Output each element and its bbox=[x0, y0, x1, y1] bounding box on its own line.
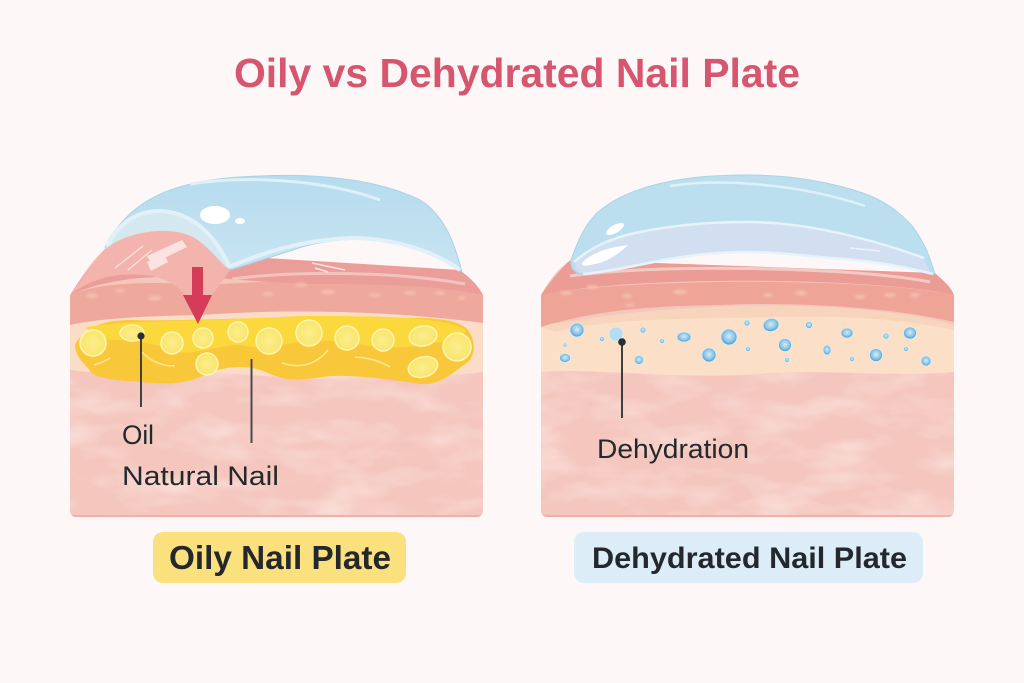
panel: dehydrated nail plate diagram bbox=[541, 175, 954, 520]
pointer: dehydration bbox=[618, 338, 626, 418]
nail underside bbox=[105, 210, 230, 268]
label: dehydration: Dehydration bbox=[597, 434, 749, 464]
pointer: oil bbox=[137, 332, 145, 407]
indented nail bed bbox=[70, 231, 230, 314]
label: oil: Oil bbox=[122, 420, 154, 450]
skin tissue layers: oily bbox=[70, 240, 483, 520]
pointer: natural nail bbox=[250, 359, 252, 443]
arrow: pressure on nail bbox=[183, 267, 212, 324]
water droplets bbox=[560, 317, 931, 366]
nail bed light streaks bbox=[115, 240, 345, 272]
oil globules bbox=[80, 320, 471, 381]
nail plate: lifted bbox=[105, 175, 462, 272]
label: natural nail: Natural Nail bbox=[122, 461, 279, 491]
badge: oily nail plate: Oily Nail Plate bbox=[169, 539, 391, 576]
nail plate: intact bbox=[571, 175, 935, 274]
badge: oily nail plate bbox=[153, 532, 406, 583]
title: Oily vs Dehydrated Nail Plate bbox=[234, 50, 800, 96]
badge: dehydrated nail plate: Dehydrated Nail Plate bbox=[592, 542, 907, 575]
oil layer bbox=[75, 316, 474, 384]
skin tissue layers: dehydrated bbox=[541, 250, 954, 520]
badge: dehydrated nail plate bbox=[574, 532, 923, 583]
panel: oily nail plate diagram bbox=[70, 175, 483, 520]
